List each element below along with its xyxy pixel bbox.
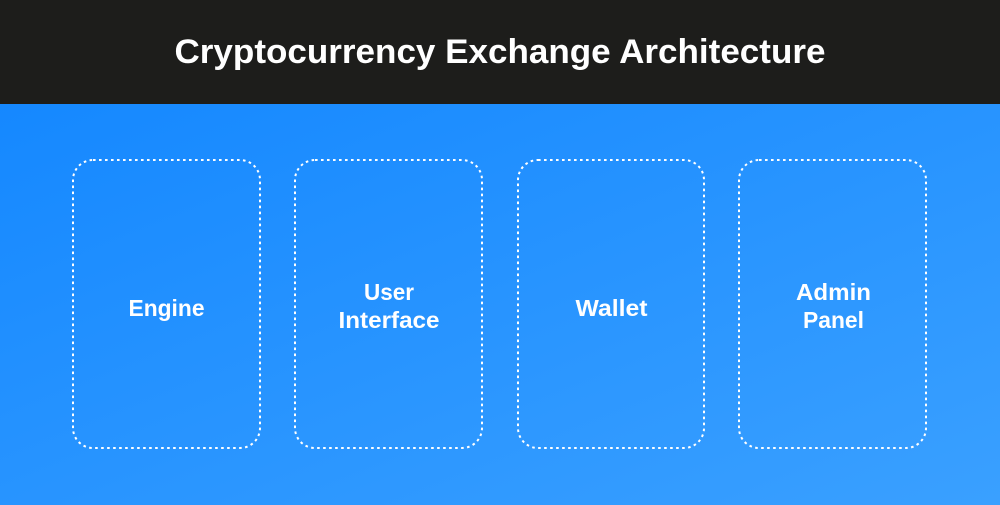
panel: Admin Panel: Admin: [796, 279, 871, 305]
panel: Wallet: [518, 160, 704, 448]
panel: Engine: [73, 160, 260, 448]
background: [0, 104, 1000, 505]
panel: Wallet: Wallet: [576, 295, 648, 321]
panel: Engine: Engine: [128, 295, 204, 321]
panel: User Interface: User: [364, 279, 414, 305]
header bar: [0, 0, 1000, 104]
panel: Admin Panel: [739, 160, 926, 448]
panel: User Interface: Interface: [338, 307, 440, 333]
title: Cryptocurrency Exchange Architecture: [174, 33, 826, 71]
panel: User Interface: [295, 160, 482, 448]
panel: Admin Panel: Panel: [803, 307, 864, 333]
